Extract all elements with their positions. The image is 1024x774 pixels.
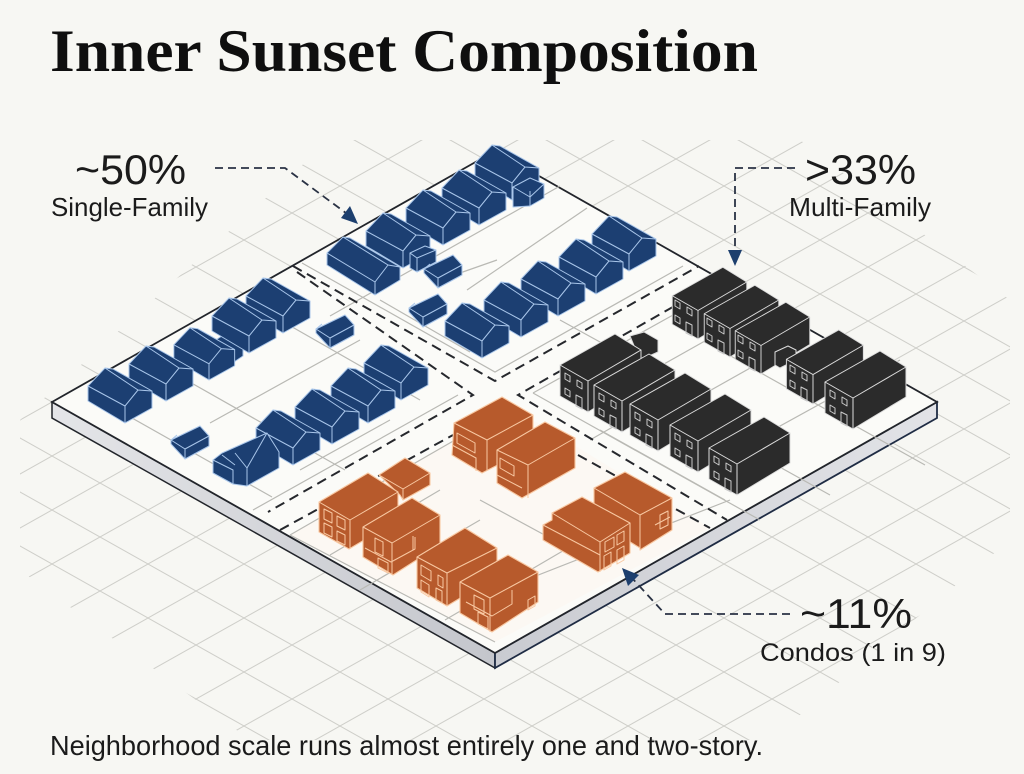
small house [171,426,209,459]
dashed street: top block [293,266,699,381]
label: Condos (1 in 9) [760,639,946,667]
platform [52,151,937,668]
callout: single-family [51,146,358,224]
building row back [672,267,906,429]
small house [424,255,462,288]
house row front [445,216,656,358]
buildings: condos [319,397,672,632]
platform left side [52,402,495,668]
platform right side [495,402,937,668]
condo small [379,458,430,500]
dashed street: left block [268,272,473,512]
house row front [213,345,428,486]
condo B7 [543,497,630,572]
condo B2 [363,498,440,575]
arrow [728,168,795,266]
platform top [52,151,937,653]
small house [316,315,354,348]
buildings: multi-family [560,267,906,495]
condo B4 [460,555,538,632]
houses: single-family top block [327,145,656,358]
label: Single-Family [51,192,208,222]
callout: multi-family [728,146,931,266]
condo B5 [497,422,575,498]
arrow [215,168,358,224]
arrow [622,568,790,614]
dashed street: orange block [280,435,710,530]
title: Inner Sunset Composition [50,18,758,84]
stat: ~50% [75,146,186,193]
dashed street: right block [518,283,727,520]
streets and lot lines [100,186,925,642]
condo B1 [319,473,398,549]
condo B8 [594,472,672,550]
small house [409,294,447,327]
label: Multi-Family [789,192,931,222]
stat: >33% [805,146,916,193]
stat: ~11% [800,590,912,637]
callout: condos [622,568,946,667]
caption: Neighborhood scale runs almost entirely one and two-story. [50,730,763,761]
houses: single-family left block [88,278,428,486]
condo B6 [452,397,533,473]
condo B3 [417,528,497,606]
house row back [327,145,544,295]
building row front [560,332,790,495]
ground grid [20,140,1010,740]
house row back [88,278,310,423]
